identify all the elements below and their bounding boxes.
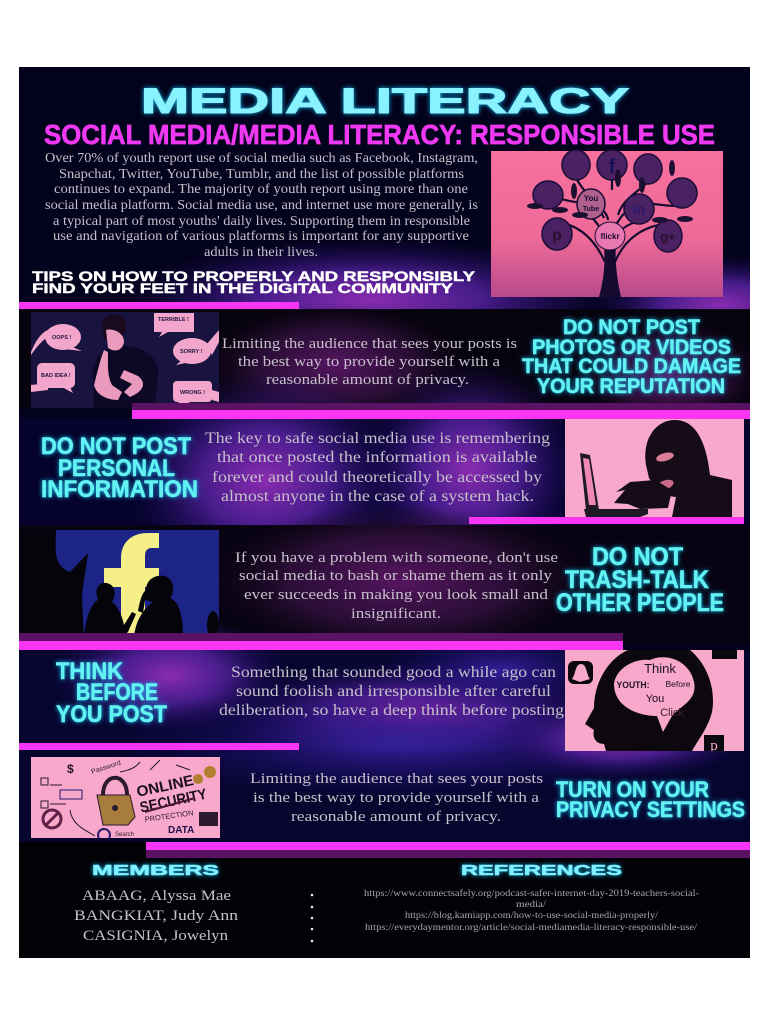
tip 1 body text: the best way to provide yourself with a [238, 354, 500, 370]
tip 4 image: head with brain: Think [644, 661, 676, 676]
subtitle: SOCIAL MEDIA/MEDIA LITERACY: RESPONSIBLE USE [44, 119, 715, 150]
divider bar tip 2 [469, 517, 744, 524]
tip 3 heading: OTHER PEOPLE [556, 589, 724, 617]
tree of social media icons image: flickr [600, 232, 620, 241]
tip 3 heading: TRASH-TALK [565, 566, 709, 594]
tip 5 body text: Limiting the audience that sees your posts [250, 771, 543, 787]
tips heading: FIND YOUR FEET IN THE DIGITAL COMMUNITY [32, 281, 453, 296]
tip 3 heading: DO NOT [592, 543, 683, 571]
tip 3 body text [235, 550, 558, 622]
tip 4 heading [56, 658, 167, 728]
tip 4 body text [219, 664, 564, 719]
bar under intro [19, 302, 299, 309]
tip 4 image: head with brain: Click [660, 707, 684, 719]
tip 5 image: online security doodle: Search [115, 832, 134, 838]
tip 5 body text [250, 771, 543, 825]
tip 1 image: embarrassed man with speech bubbles: BAD IDEA ! [41, 373, 71, 379]
intro text block: use and navigation of various platforms is important for any supportive [53, 228, 469, 243]
tip 2 body text [205, 430, 550, 505]
tip 5 image: online security doodle: DATA [168, 825, 194, 836]
tip 4 heading: YOU POST [56, 701, 167, 728]
tip 5 heading: PRIVACY SETTINGS [556, 797, 745, 822]
tip 1 heading: DO NOT POST [563, 316, 700, 339]
references list: media/ [516, 899, 547, 909]
tip 4 image: head with brain: YOUTH: [616, 680, 650, 690]
tip 3 body text: social media to bash or shame them as it only [239, 568, 553, 584]
tip 2 heading: INFORMATION [41, 476, 198, 503]
tip 4 heading: THINK [56, 658, 124, 685]
tip 5 image: online security doodle: ONLINE [135, 772, 195, 801]
references heading: REFERENCES [461, 862, 622, 879]
tip 2 heading: PERSONAL [58, 455, 175, 482]
references list: https://everydaymentor.org/article/social-mediamedia-literacy-responsible-use/ [365, 922, 698, 932]
members list: BANGKIAT, Judy Ann [74, 908, 239, 924]
tree of social media icons image: Tube [583, 206, 599, 213]
tip 2 body text: that once posted the information is available [217, 449, 537, 466]
members list: CASIGNIA, Jowelyn [83, 928, 229, 944]
tip 1 image: embarrassed man with speech bubbles: TERRIBLE ! [158, 317, 189, 323]
tree of social media icons image: in [633, 201, 645, 217]
divider bars tip 3 [19, 633, 623, 650]
tip 1 heading: THAT COULD DAMAGE [522, 355, 741, 378]
tip 1 body text: reasonable amount of privacy. [266, 372, 469, 388]
tip 1 heading: YOUR REPUTATION [537, 375, 725, 398]
tip 2 body text: forever and could theoretically be accessed by [212, 469, 542, 486]
tip 4 image: head with brain [565, 650, 744, 754]
intro text block: a typical part of most youths' daily lives. Supporting them in responsible [53, 213, 470, 228]
tip 3 image: silhouettes before Facebook logo [56, 530, 219, 633]
tree of social media icons image: p [552, 227, 562, 244]
tip 4 image: head with brain: p [710, 738, 718, 754]
tip 4 body text: deliberation, so have a deep think before posting [219, 702, 564, 719]
tip 3 heading [556, 543, 724, 617]
tip 5 heading [556, 777, 745, 822]
tips heading [32, 269, 475, 296]
divider bar tip 4 [19, 743, 299, 750]
tip 4 image: head with brain: Before [665, 679, 691, 689]
intro text block: social media platform. Social media use, and internet use more generally, is [45, 197, 478, 212]
divider bars tip 5 [146, 842, 750, 858]
intro text block: adults in their lives. [204, 244, 318, 259]
tip 5 image: online security doodle: PROTECTION [144, 808, 194, 824]
tip 5 heading: TURN ON YOUR [556, 777, 709, 802]
tip 3 body text: ever succeeds in making you look small and [244, 587, 549, 603]
tip 1 heading [522, 316, 741, 398]
intro text block: Snapchat, Twitter, YouTube, Tumblr, and the list of possible platforms [59, 166, 464, 181]
tip 1 image: embarrassed man with speech bubbles [31, 312, 219, 408]
tip 1 image: embarrassed man with speech bubbles: SORRY ! [180, 349, 203, 355]
tip 5 body text: is the best way to provide yourself with a [253, 790, 539, 806]
tree of social media icons image [491, 150, 723, 297]
tip 4 image: head with brain: You [646, 693, 664, 705]
tip 5 image: online security doodle: $ [67, 762, 74, 776]
tip 1 body text: Limiting the audience that sees your posts is [222, 336, 517, 352]
tip 4 body text: Something that sounded good a while ago can [231, 664, 556, 681]
title: MEDIA LITERACY [141, 82, 629, 121]
intro text block: Over 70% of youth report use of social media such as Facebook, Instagram, [45, 150, 478, 165]
tree of social media icons image: f [609, 156, 616, 178]
tip 4 heading: BEFORE [76, 679, 158, 706]
tree of social media icons image: g+ [660, 229, 676, 244]
tip 1 image: embarrassed man with speech bubbles: WRONG ! [180, 390, 205, 396]
members list: ABAAG, Alyssa Mae [82, 888, 231, 904]
tip 2 heading: DO NOT POST [41, 433, 191, 460]
divider bars tip 1 [132, 403, 750, 419]
tip 5 image: online security doodle: Password [90, 760, 122, 776]
bullet dots [311, 894, 313, 942]
tip 5 body text: reasonable amount of privacy. [291, 809, 501, 825]
tip 2 body text: The key to safe social media use is remembering [205, 430, 550, 447]
tip 5 image: online security doodle [31, 757, 220, 841]
tip 1 heading: PHOTOS OR VIDEOS [532, 336, 731, 359]
tree of social media icons image: You [584, 194, 598, 203]
references list: https://www.connectsafely.org/podcast-safer-internet-day-2019-teachers-social- [364, 888, 699, 898]
references list [364, 888, 699, 932]
members list [74, 888, 239, 944]
tip 1 body text [222, 336, 517, 388]
intro text block: continues to expand. The majority of youth report using more than one [54, 181, 468, 196]
references list: https://blog.kamiapp.com/how-to-use-social-media-properly/ [405, 910, 659, 920]
members heading: MEMBERS [92, 862, 219, 879]
tip 4 body text: sound foolish and irresponsible after careful [236, 683, 552, 700]
tip 5 image: online security doodle: SECURITY [138, 786, 208, 816]
tip 1 image: embarrassed man with speech bubbles: OOPS ! [52, 335, 71, 341]
tip 2 image: masked hacker at laptop [565, 419, 744, 517]
intro text block [45, 150, 478, 259]
tip 2 body text: almost anyone in the case of a system hack. [221, 488, 534, 505]
tip 3 body text: insignificant. [351, 606, 441, 622]
tips heading: TIPS ON HOW TO PROPERLY AND RESPONSIBLY [32, 269, 475, 284]
tip 2 heading [41, 433, 198, 503]
tip 3 body text: If you have a problem with someone, don't use [235, 550, 558, 566]
